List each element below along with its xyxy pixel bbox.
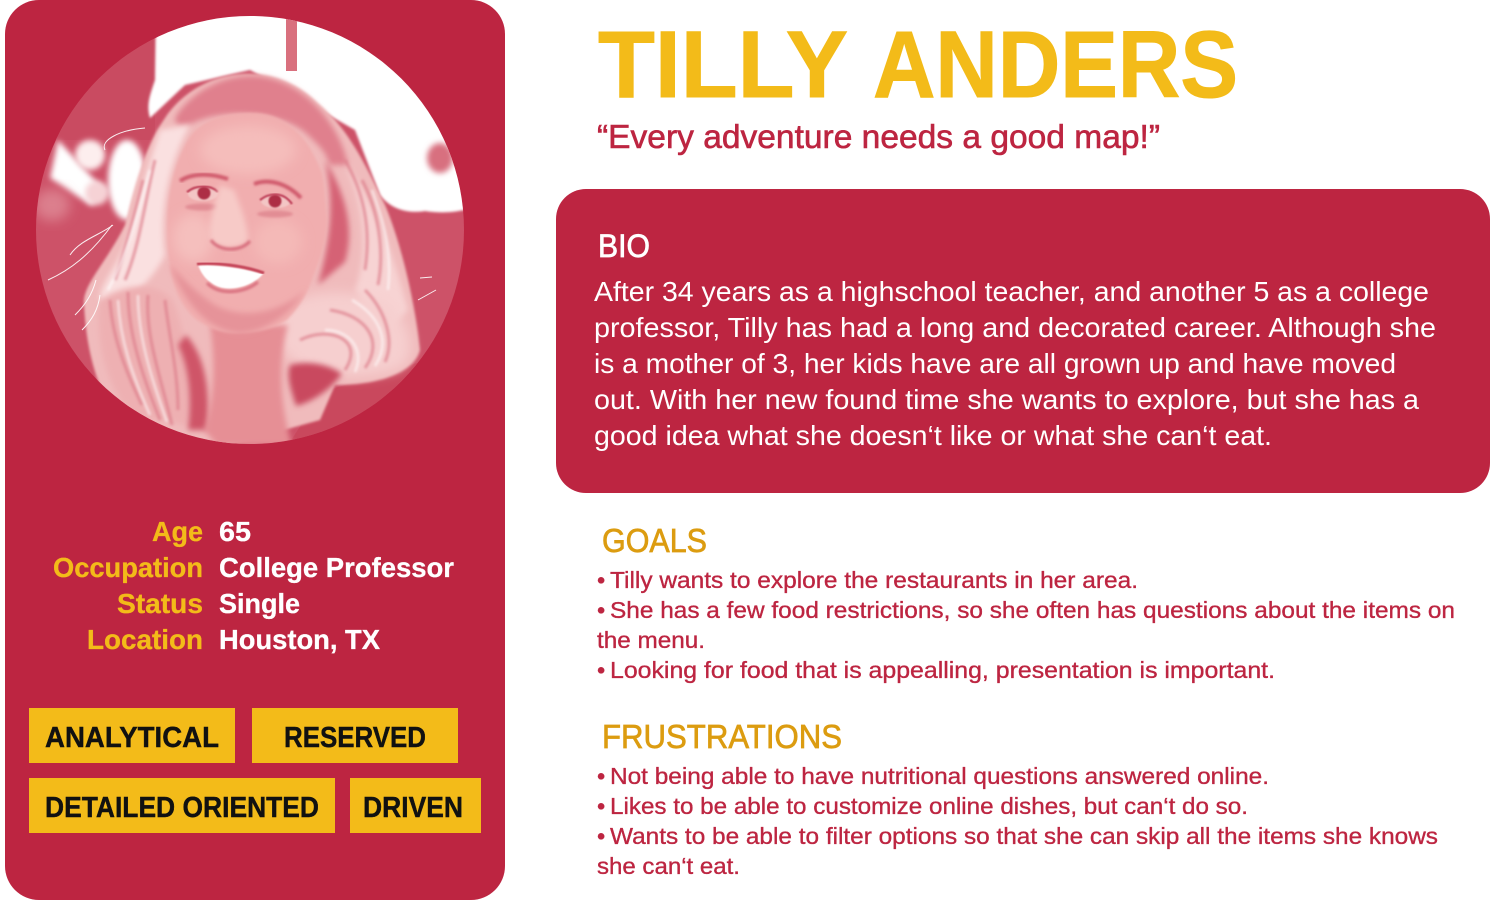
tag: detailed oriented: DETAILED ORIENTED [45,792,319,824]
nose [210,185,248,248]
eyes and brows [180,175,228,181]
title: TILLY [598,12,848,118]
frustrations list: • [597,823,605,849]
title: ANDERS [873,12,1238,118]
occupation [53,552,454,583]
panel: bio [556,189,1490,493]
goals heading: GOALS [602,522,707,559]
neck [204,325,292,446]
age: Age [152,516,203,547]
tag: driven: DRIVEN [363,792,463,824]
status: Status [117,588,203,619]
frustrations list: Likes to be able to customize online dishes, but can‘t do so. [610,793,1248,819]
goals list: the menu. [597,627,705,653]
frustrations list [597,763,1438,879]
bio text: out. With her new found time she wants to explore, but she has a [594,384,1419,415]
location: Houston, TX [219,624,381,655]
demographic details [53,516,454,655]
age [152,516,251,547]
background: sky and bokeh [30,10,480,221]
tag: analytical: ANALYTICAL [45,722,219,754]
occupation: College Professor [219,552,454,583]
location [87,624,381,655]
goals list [597,567,1455,683]
frustrations list: • [597,793,605,819]
age: 65 [219,516,251,547]
goals list: • [597,657,605,683]
occupation: Occupation [53,552,203,583]
tag: reserved: RESERVED [284,722,426,754]
goals list: Tilly wants to explore the restaurants in her area. [610,567,1138,593]
bio text: good idea what she doesn‘t like or what she can‘t eat. [594,420,1272,451]
face [167,113,327,333]
status [117,588,300,619]
bio text: professor, Tilly has had a long and decorated career. Although she [594,312,1436,343]
tag: reserved [252,708,458,763]
bio text: is a mother of 3, her kids have are all grown up and have moved [594,348,1396,379]
goals list: • [597,597,605,623]
portrait photo [30,10,480,460]
frustrations heading: FRUSTRATIONS [602,718,842,755]
title [598,12,1238,118]
bio text [594,276,1436,451]
frustrations list: she can‘t eat. [597,853,740,879]
bio text: After 34 years as a highschool teacher, and another 5 as a college [594,276,1429,307]
goals list: Looking for food that is appealling, presentation is important. [610,657,1275,683]
frustrations list: Not being able to have nutritional questions answered online. [610,763,1269,789]
frustrations list: Wants to be able to filter options so that she can skip all the items she knows [610,823,1438,849]
hair [48,74,436,445]
tag: detailed oriented [29,778,335,833]
goals list: She has a few food restrictions, so she often has questions about the items on [610,597,1455,623]
location: Location [87,624,203,655]
quote: “Every adventure needs a good map!” [597,118,1160,155]
tag: driven [350,778,481,833]
status: Single [219,588,300,619]
jacket [292,363,417,440]
goals list: • [597,567,605,593]
panel: profile card [5,0,505,900]
trait tags [29,708,481,833]
mouth [198,265,263,289]
frustrations list: • [597,763,605,789]
bio heading: BIO [598,228,650,264]
tag: analytical [29,708,235,763]
